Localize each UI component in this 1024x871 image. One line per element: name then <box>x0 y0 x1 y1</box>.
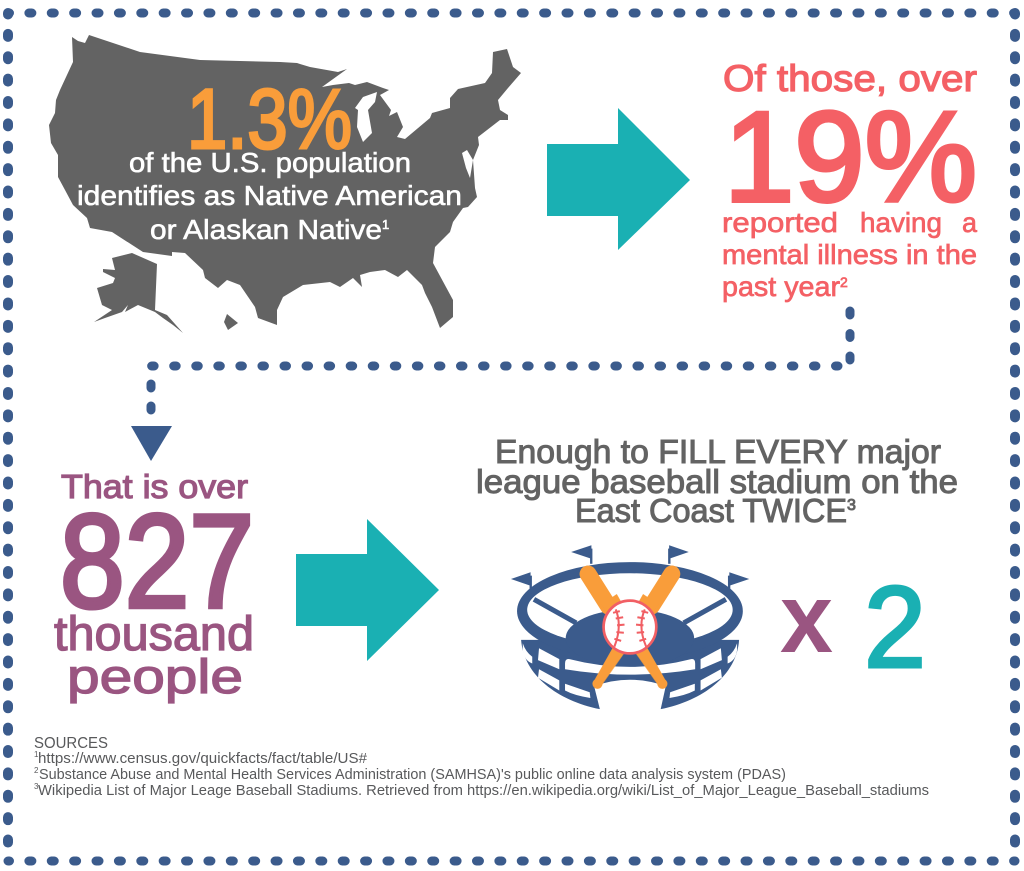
text: population description: 1 <box>382 217 389 232</box>
text: mental illness description: having <box>860 207 942 238</box>
text: times two: x <box>780 563 833 673</box>
text block: sources: 3 <box>34 782 39 791</box>
text: mental illness description: mental illness in the <box>722 239 977 270</box>
text block: sources: Wikipedia List of Major Leage Baseball Stadiums. Retrieved from https://en.wikipedia.org/wiki/List_of_Major_League_Baseball_stadiums <box>38 783 929 799</box>
text: times two <box>780 562 926 692</box>
text block: sources: 2 <box>34 766 39 775</box>
text: population description: or Alaskan Native <box>150 214 382 245</box>
text: mental illness description <box>722 207 977 302</box>
heading: that is over: That is over <box>61 468 248 505</box>
text block: sources: https://www.census.gov/quickfacts/fact/table/US# <box>38 751 367 767</box>
panel: US population <box>49 35 521 333</box>
text block: sources <box>34 735 929 799</box>
text: mental illness description: a <box>962 207 977 238</box>
big number: 19%: 19% <box>724 86 977 229</box>
panel: 827 thousand people <box>54 468 254 704</box>
text block: sources: SOURCES <box>34 735 108 752</box>
text: population description: of the U.S. population <box>129 147 411 178</box>
text: thousand people <box>54 608 254 704</box>
heading: stadium comparison: 3 <box>847 497 856 514</box>
text: mental illness description: past year <box>722 271 840 302</box>
icon: US map <box>49 35 521 333</box>
text: mental illness description: reported <box>722 207 838 238</box>
arrow: dotted connector <box>131 311 850 461</box>
text: mental illness description: 2 <box>840 274 848 290</box>
heading: stadium comparison: Enough to FILL EVERY major <box>495 433 941 470</box>
icon: baseball stadium <box>511 545 749 709</box>
text: thousand people: thousand <box>54 608 254 661</box>
big number: 827: 827 <box>60 488 254 636</box>
arrow: to mental illness <box>547 108 690 250</box>
text: population description: identifies as Native American <box>77 180 462 211</box>
text: population description <box>77 147 462 245</box>
heading: stadium comparison <box>476 433 958 529</box>
heading: stadium comparison: league baseball stadium on the <box>476 463 958 500</box>
text block: sources: Substance Abuse and Mental Health Services Administration (SAMHSA)'s public online data analysis system (PDAS) <box>39 767 786 783</box>
text block: sources: 1 <box>34 750 39 759</box>
text: thousand people: people <box>67 651 243 704</box>
panel: mental illness <box>722 58 977 302</box>
heading: stadium comparison: East Coast TWICE <box>575 492 847 529</box>
heading: of those: Of those, over <box>723 58 977 99</box>
text: times two: 2 <box>864 562 926 692</box>
arrow: to stadiums <box>296 519 439 661</box>
big number: 1.3%: 1.3% <box>187 72 352 166</box>
